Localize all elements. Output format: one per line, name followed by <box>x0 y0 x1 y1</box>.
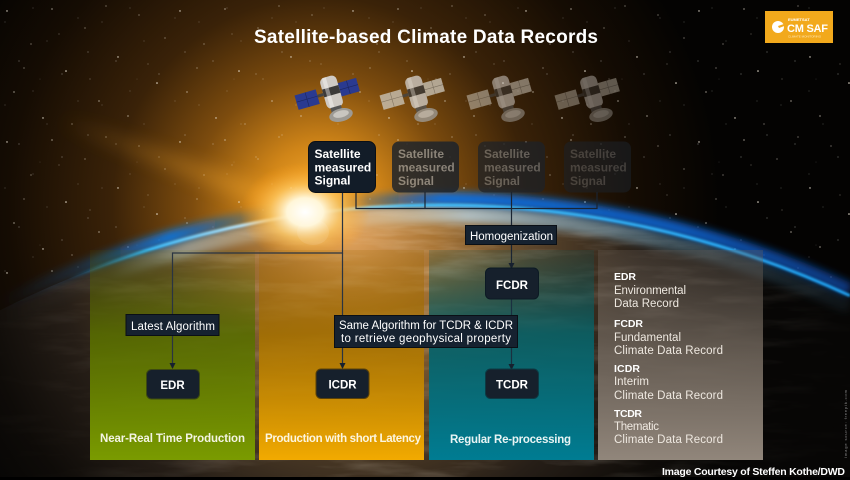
satellite 1 <box>292 69 363 124</box>
panel: glossary background <box>598 250 763 460</box>
sun flare <box>240 162 370 262</box>
signal box 3: measured <box>484 160 541 174</box>
glossary: ICDR: Climate Data Record <box>614 390 723 402</box>
glossary: ICDR <box>614 363 723 402</box>
signal box 1: measured <box>314 160 371 174</box>
logo: CM SAF: EUMETSAT <box>788 17 810 22</box>
connector lines <box>172 192 597 369</box>
box: FCDR <box>486 268 538 299</box>
glossary: ICDR: ICDR <box>614 363 640 375</box>
signal box 4: Signal <box>570 174 606 188</box>
glossary: TCDR: TCDR <box>614 408 642 420</box>
signal box 3: Satellite <box>484 147 530 161</box>
signal box 4: measured <box>570 160 627 174</box>
signal box 3: Signal <box>484 174 520 188</box>
image credit: Image Courtesy of Steffen Kothe/DWD <box>662 466 845 478</box>
signal box 1: Satellite <box>314 147 361 161</box>
title: Satellite-based Climate Data Records <box>254 27 598 48</box>
glossary: FCDR: Fundamental <box>614 332 681 344</box>
label: same algorithm: to retrieve geophysical property <box>341 333 511 345</box>
satellite 3 <box>464 69 535 124</box>
satellite 2 <box>377 69 448 124</box>
glossary: ICDR: Interim <box>614 376 649 388</box>
signal box 4: Satellite <box>570 147 616 161</box>
panel: regular re-processing <box>429 250 594 460</box>
glossary: TCDR: Climate Data Record <box>614 434 723 446</box>
signal box 2 <box>392 142 459 192</box>
glossary: EDR: Data Record <box>614 298 679 310</box>
logo: CM SAF <box>765 11 833 43</box>
glossary: EDR <box>614 271 686 310</box>
panel caption: production with short latency: Production with short Latency <box>265 433 422 445</box>
signal box 4 <box>564 142 631 192</box>
label: same algorithm: Same Algorithm for TCDR & ICDR <box>339 320 513 332</box>
box: FCDR: FCDR <box>496 280 529 292</box>
box: ICDR: ICDR <box>328 380 357 392</box>
signal box 2: measured <box>398 160 455 174</box>
glossary: TCDR: Thematic <box>614 421 659 433</box>
glossary: FCDR: FCDR <box>614 318 643 330</box>
glossary: EDR: Environmental <box>614 285 686 297</box>
signal box 2: Signal <box>398 174 434 188</box>
glossary: FCDR: Climate Data Record <box>614 345 723 357</box>
panel caption: regular re-processing: Regular Re-processing <box>450 434 571 446</box>
label: same algorithm <box>334 316 518 348</box>
background: earth with atmosphere <box>0 190 850 480</box>
label: latest algorithm: Latest Algorithm <box>131 321 215 333</box>
logo: CM SAF: CLIMATE MONITORING <box>788 34 822 38</box>
signal box 1: Signal <box>314 174 351 188</box>
signal box 3 <box>478 142 545 192</box>
box: TCDR <box>486 369 538 398</box>
box: EDR <box>146 370 200 399</box>
logo: CM SAF: CM SAF <box>787 23 828 35</box>
glossary: EDR: EDR <box>614 271 636 283</box>
vertical image source note: Image source: freepik.com <box>843 389 848 458</box>
signal box 2: Satellite <box>398 147 444 161</box>
label: homogenization <box>466 226 556 244</box>
box: ICDR <box>316 369 369 398</box>
panel: near-real time production <box>90 250 255 460</box>
panel caption: near-real time production: Near-Real Time Production <box>100 433 245 445</box>
box: EDR: EDR <box>160 380 185 392</box>
panel: production with short latency <box>259 250 424 460</box>
glossary: TCDR <box>614 408 723 446</box>
label: homogenization: Homogenization <box>470 231 553 243</box>
label: latest algorithm <box>126 314 219 336</box>
glossary: FCDR <box>614 318 723 357</box>
signal box 1 <box>308 142 376 192</box>
satellite 4 <box>552 69 623 124</box>
box: TCDR: TCDR <box>496 380 529 392</box>
